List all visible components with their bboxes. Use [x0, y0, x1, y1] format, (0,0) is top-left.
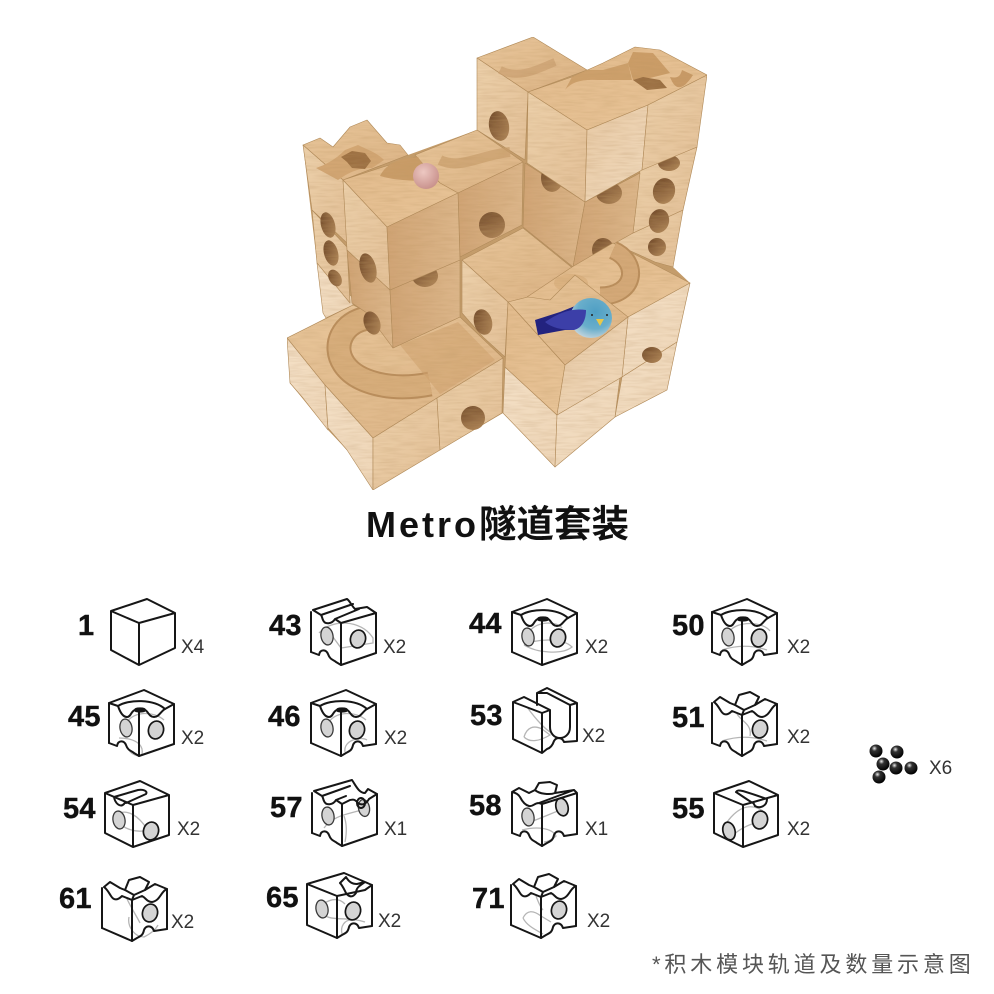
title: Metro隧道套装	[366, 503, 629, 545]
base: lower-left blocks	[287, 305, 503, 490]
item 61	[59, 877, 194, 941]
marbles x6: X6	[929, 758, 952, 779]
item 61: X2	[171, 912, 194, 933]
bird block	[505, 275, 628, 415]
item 44	[469, 599, 608, 665]
left tower upper	[343, 130, 523, 290]
item 57: 57	[270, 792, 303, 824]
left tower lower	[303, 120, 460, 348]
item 57: X1	[384, 819, 407, 840]
parts list	[59, 599, 952, 941]
item 65	[266, 873, 401, 938]
bird figurine	[535, 298, 612, 338]
item 46: 46	[268, 701, 301, 733]
item 50: X2	[787, 637, 810, 658]
item 51	[672, 692, 810, 756]
item 58: 58	[469, 790, 502, 822]
item 50	[672, 599, 810, 665]
back right column	[477, 37, 697, 267]
item 57	[270, 780, 407, 846]
item 45: X2	[181, 728, 204, 749]
photo: assembled wooden marble-run blocks	[287, 37, 707, 490]
item 53	[470, 688, 605, 753]
item 58: X1	[585, 819, 608, 840]
holes: back column	[487, 109, 680, 262]
holes: centre and right	[471, 307, 495, 337]
item 55	[672, 781, 810, 847]
item 55: X2	[787, 819, 810, 840]
item 43	[269, 599, 406, 665]
item 53: 53	[470, 700, 503, 732]
item 1: 1	[78, 610, 94, 642]
item 61: 61	[59, 883, 92, 915]
wooden blocks	[287, 37, 707, 490]
item 45	[68, 690, 204, 756]
item 50: 50	[672, 610, 705, 642]
left tower grooves	[380, 157, 435, 182]
item 43: 43	[269, 610, 302, 642]
top blocks	[527, 47, 707, 202]
top grooves	[565, 63, 632, 90]
base grooves	[339, 318, 430, 387]
item 43: X2	[383, 637, 406, 658]
item 54: X2	[177, 819, 200, 840]
item 53: X2	[582, 726, 605, 747]
footnote: *积木模块轨道及数量示意图	[652, 952, 975, 977]
item 65: 65	[266, 882, 299, 914]
centre and right lower blocks	[462, 228, 690, 467]
item 51: X2	[787, 727, 810, 748]
item 54	[63, 781, 200, 847]
marble	[413, 163, 439, 189]
marbles x6	[870, 744, 952, 784]
item 44: X2	[585, 637, 608, 658]
silhouette underlay	[287, 37, 707, 490]
item 54: 54	[63, 793, 96, 825]
item 65: X2	[378, 911, 401, 932]
right groove	[600, 250, 631, 296]
item 44: 44	[469, 608, 502, 640]
item 45: 45	[68, 701, 101, 733]
item 1: X4	[181, 637, 205, 658]
item 51: 51	[672, 702, 705, 734]
item 46: X2	[384, 728, 407, 749]
item 71: X2	[587, 911, 610, 932]
item 71: 71	[472, 883, 505, 915]
item 55: 55	[672, 793, 705, 825]
item 58	[469, 782, 608, 846]
item 71	[472, 874, 610, 938]
item 1	[78, 599, 205, 665]
item 46	[268, 690, 407, 756]
holes: left tower	[318, 211, 384, 337]
